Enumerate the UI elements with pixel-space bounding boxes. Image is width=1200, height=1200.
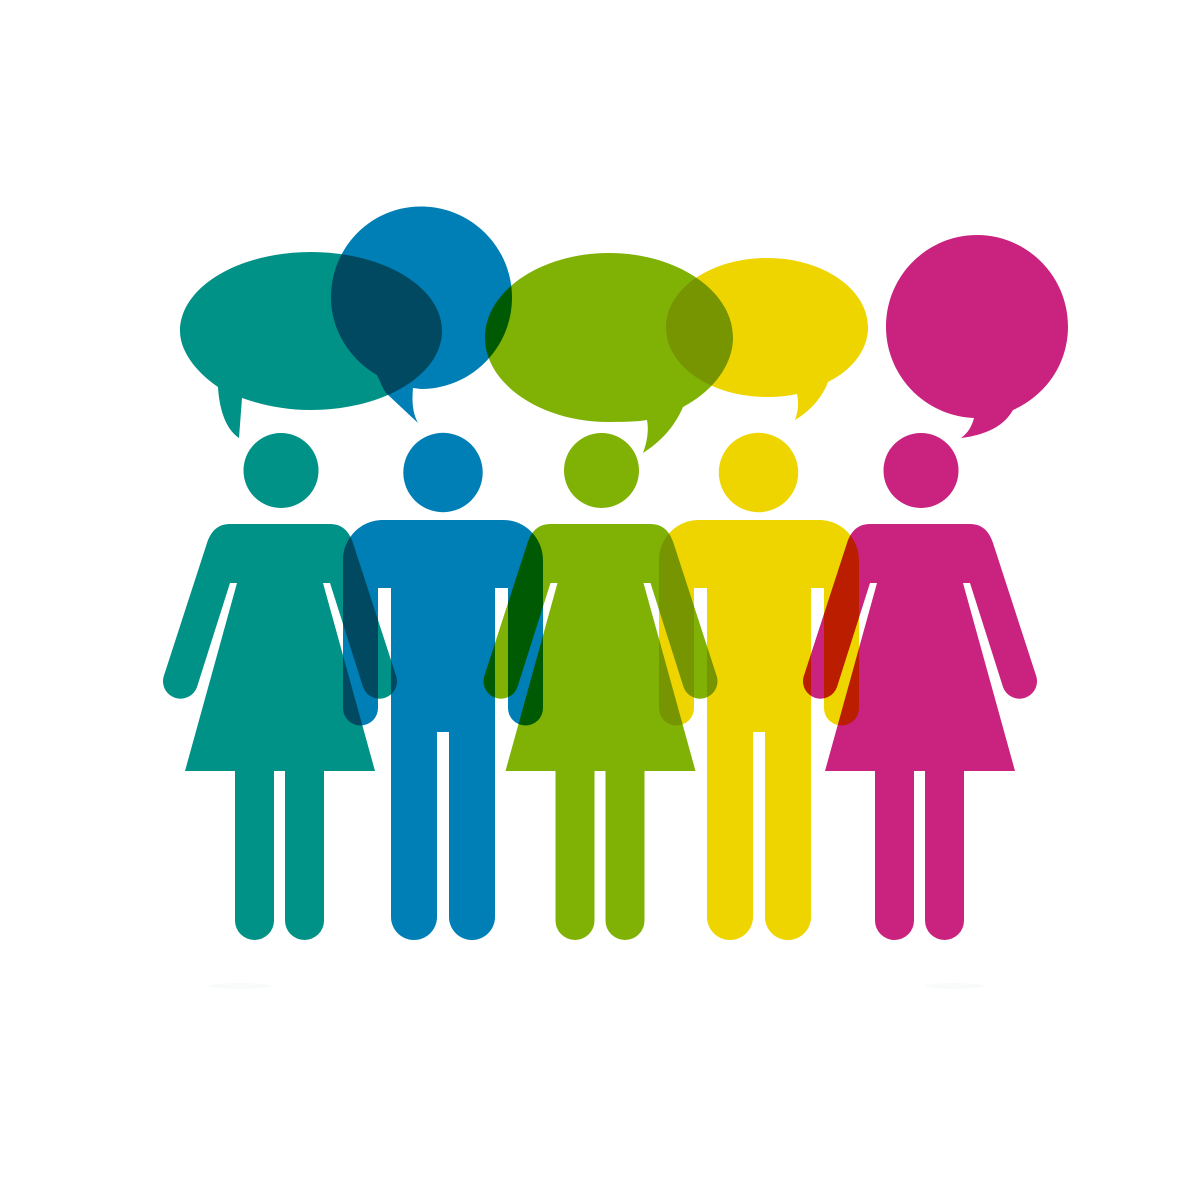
person: blue man xyxy=(343,433,543,940)
speech bubble: magenta xyxy=(886,235,1068,438)
person: teal woman xyxy=(163,433,397,940)
dress body xyxy=(803,524,1037,940)
person: green woman xyxy=(483,433,718,940)
head xyxy=(403,433,483,512)
head xyxy=(564,433,639,508)
speech bubble: yellow xyxy=(666,258,868,420)
speech bubble: green xyxy=(485,253,733,453)
person: magenta woman xyxy=(803,433,1037,940)
head xyxy=(244,433,318,508)
body xyxy=(343,520,543,940)
dress body xyxy=(483,524,718,940)
head xyxy=(719,433,798,512)
head xyxy=(884,433,958,508)
faint ground reflection xyxy=(208,983,985,989)
person: yellow man xyxy=(659,433,859,940)
body xyxy=(659,520,859,940)
speech bubble: teal xyxy=(180,252,442,438)
dress body xyxy=(163,524,397,940)
speech bubble: blue xyxy=(331,206,512,423)
